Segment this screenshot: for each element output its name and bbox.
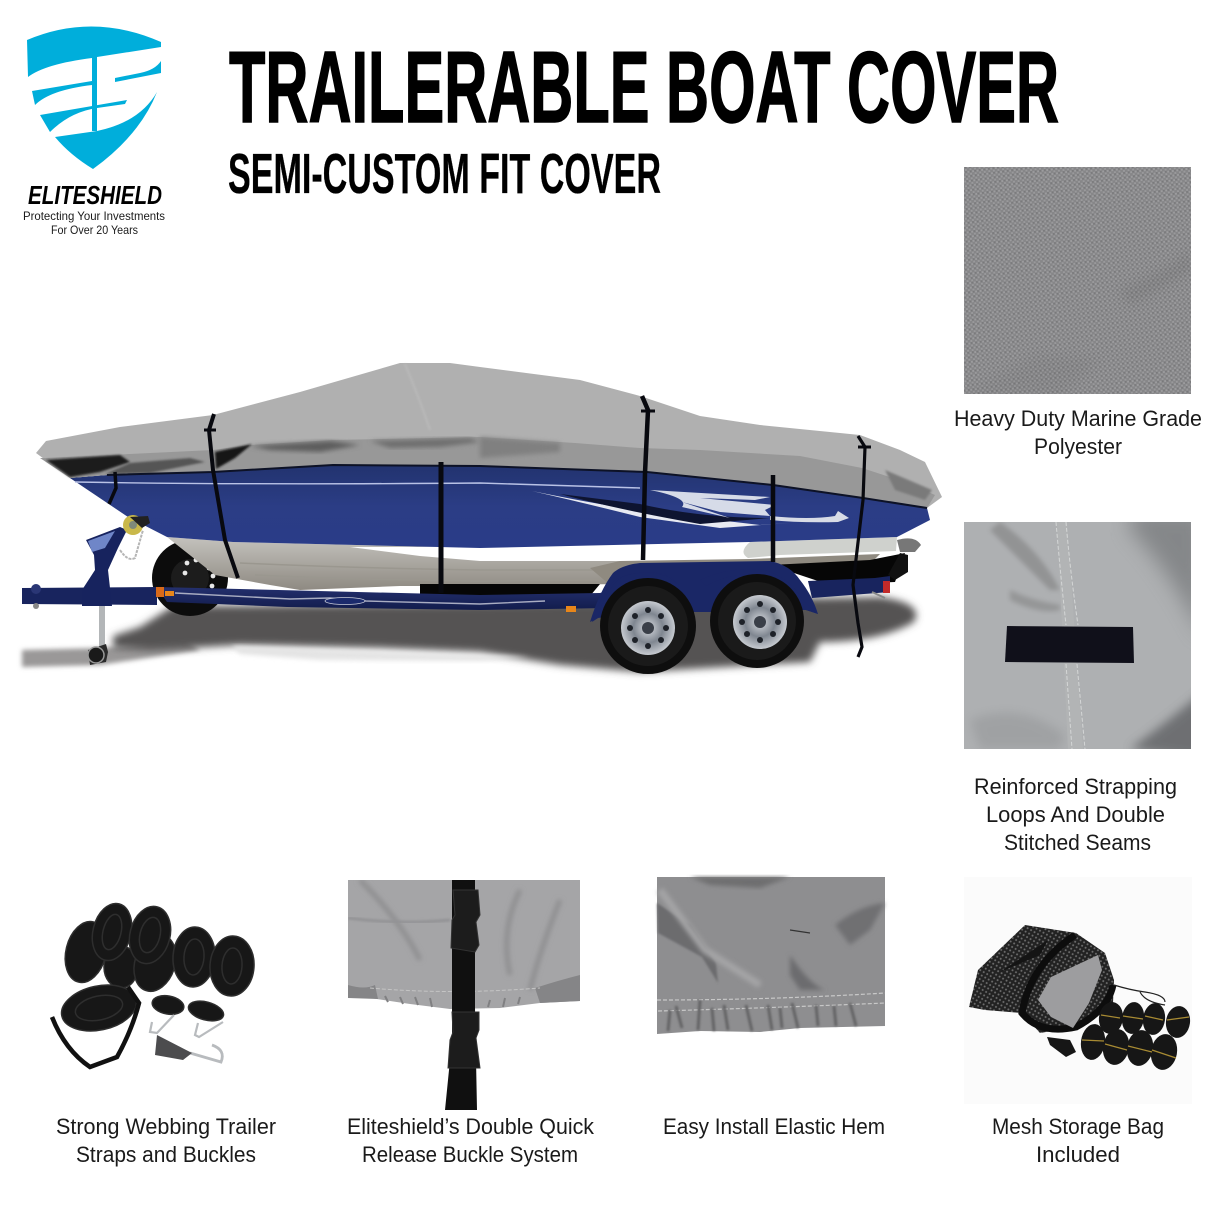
caption: Eliteshield’s Double Quick (347, 1114, 595, 1139)
caption: Easy Install Elastic Hem (663, 1114, 885, 1139)
caption (992, 1114, 1164, 1167)
subtitle: SEMI-CUSTOM FIT COVER (228, 142, 661, 206)
fabric swatch (964, 167, 1191, 394)
caption (974, 774, 1177, 855)
photo: cover hem with buckle strap (348, 880, 580, 1110)
trailer wheels (592, 569, 818, 674)
caption: Included (1036, 1142, 1120, 1167)
panel: webbing straps and buckles (52, 899, 276, 1167)
caption: Heavy Duty Marine Grade (954, 406, 1202, 431)
caption (954, 406, 1202, 459)
panel: marine grade polyester fabric (954, 167, 1202, 459)
spare wheel behind frame (152, 540, 228, 616)
caption: Polyester (1034, 434, 1122, 459)
caption (56, 1114, 276, 1167)
panel: strapping loop and seams (964, 510, 1205, 855)
logo: Eliteshield shield and wordmark (23, 26, 165, 237)
caption (347, 1114, 595, 1167)
stern drive (888, 538, 921, 580)
ground shadow (22, 597, 916, 672)
tagline: For Over 20 Years (51, 223, 138, 237)
caption: Straps and Buckles (76, 1142, 256, 1167)
caption: Reinforced Strapping (974, 774, 1177, 799)
photo: mesh bag with packed cover and straps (964, 877, 1192, 1104)
caption: Loops And Double (986, 802, 1165, 827)
wordmark: ELITESHIELD (28, 180, 162, 210)
photo: gathered elastic hem (657, 877, 885, 1034)
caption: Mesh Storage Bag (992, 1114, 1164, 1139)
caption: Stitched Seams (1004, 830, 1151, 855)
tie-down straps (109, 396, 871, 657)
tagline (23, 209, 165, 237)
panel: elastic hem (657, 877, 885, 1139)
caption: Release Buckle System (362, 1142, 578, 1167)
caption: Strong Webbing Trailer (56, 1114, 276, 1139)
photo: stitched seam with loop (964, 510, 1205, 760)
tagline: Protecting Your Investments (23, 209, 165, 223)
trailer frame (22, 576, 890, 612)
photo: coiled straps and hooks (52, 899, 256, 1067)
boat cover (36, 363, 942, 508)
panel: double quick release buckle (347, 880, 595, 1167)
panel: mesh storage bag (964, 877, 1192, 1167)
silver lower hull (167, 537, 905, 596)
boat on trailer illustration (22, 363, 942, 674)
fender and axle (590, 561, 818, 622)
hull graphic swoosh (532, 490, 849, 528)
icon: blue shield (27, 26, 161, 169)
blue hull (70, 465, 930, 548)
coupler, winch stand and jack wheel (31, 515, 150, 665)
